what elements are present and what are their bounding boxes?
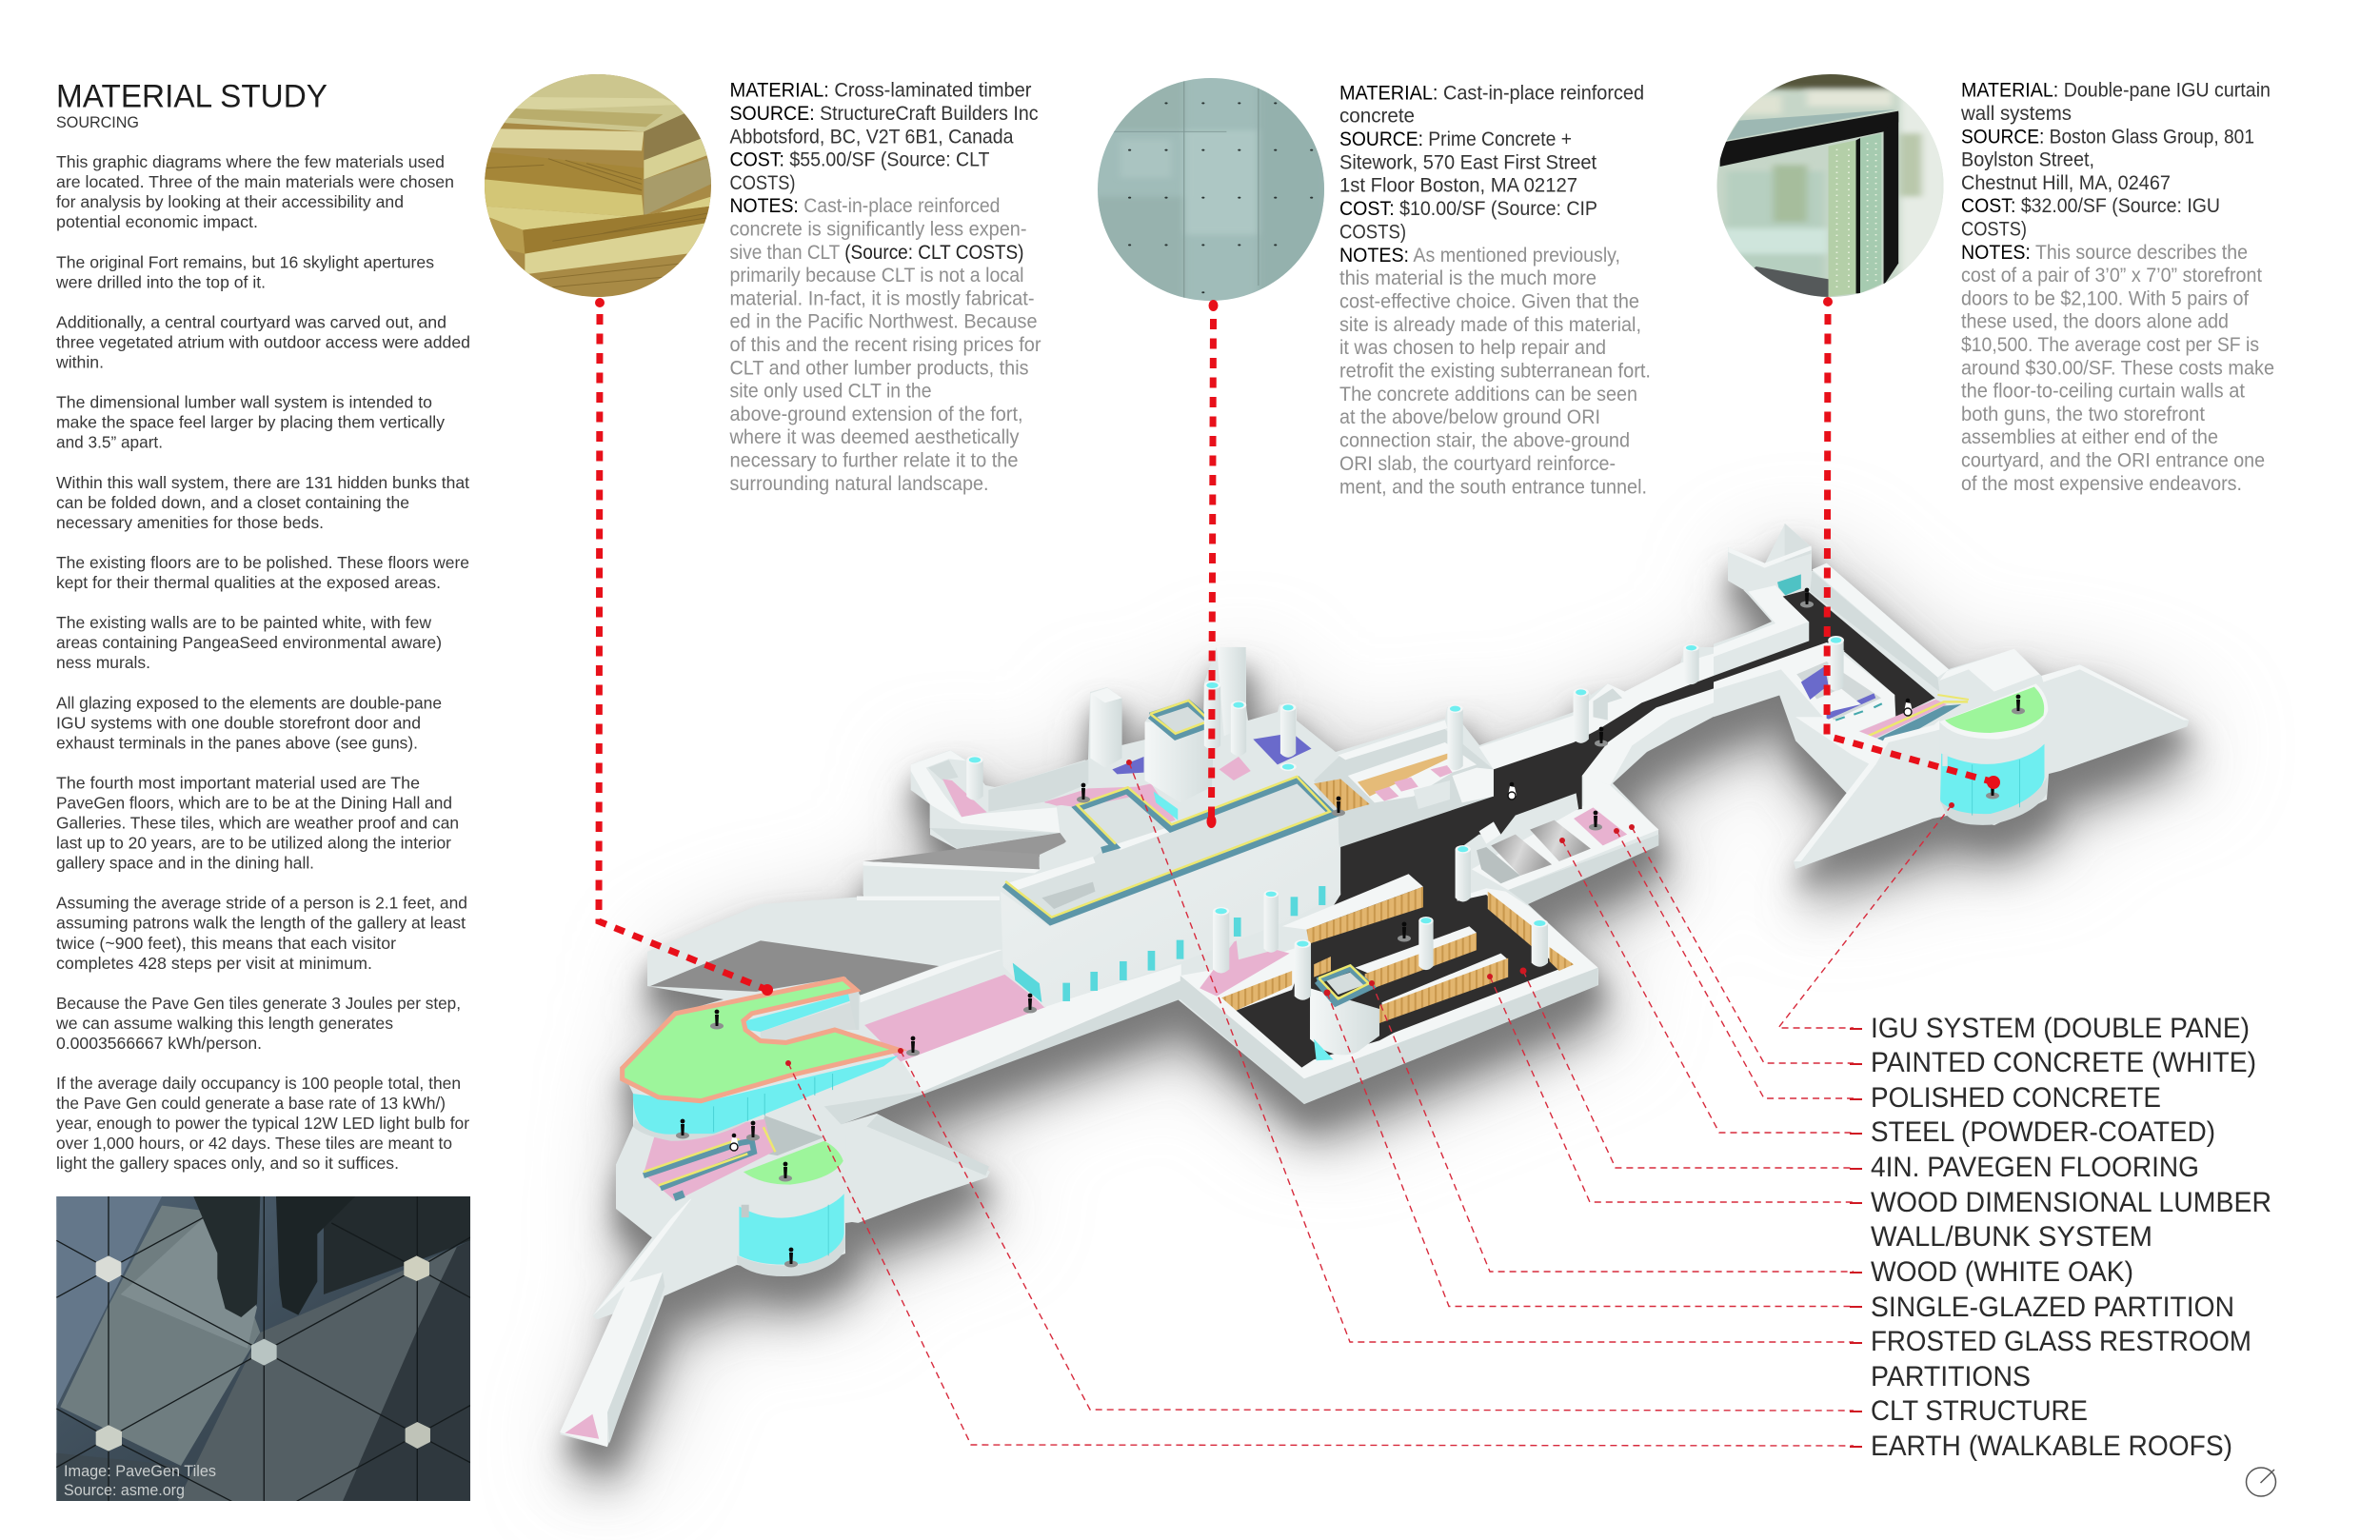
leader: steel	[1562, 840, 1854, 1133]
concrete source details: Sitework, 570 East First Street	[1339, 151, 1597, 173]
stairs room	[1477, 793, 1627, 883]
leader: earth roofs	[788, 1063, 1854, 1446]
text block: sourcing narrative: 0.0003566667 kWh/person.	[56, 1034, 262, 1053]
glass source details	[1960, 80, 2271, 240]
text block: IGU glass material	[1960, 80, 2274, 495]
text block: sourcing narrative: The fourth most important material used are The	[56, 774, 420, 793]
CLT notes: site only used CLT in the	[729, 381, 931, 403]
text block: sourcing narrative: Because the Pave Gen tiles generate 3 Joules per step,	[56, 994, 461, 1013]
text block: sourcing narrative: exhaust terminals in the panes above (see guns).	[56, 733, 418, 752]
text block: sourcing narrative: ness murals.	[56, 653, 150, 672]
text block: sourcing narrative: year, enough to power the typical 12W LED light bulb for	[56, 1114, 469, 1133]
leader: PaveGen flooring	[1523, 971, 1854, 1168]
material photo: double-pane IGU glass	[1714, 67, 1948, 302]
text block: sourcing narrative: Galleries. These tiles, which are weather proof and can	[56, 814, 459, 833]
east wedge	[2038, 664, 2189, 771]
leader dots	[785, 760, 1954, 1448]
legend of materials: WOOD (WHITE OAK)	[1871, 1256, 2133, 1288]
text block: sourcing narrative: Within this wall system, there are 131 hidden bunks that	[56, 473, 469, 492]
CLT notes: NOTES: Cast-in-place reinforced	[729, 195, 1000, 217]
text block: sourcing narrative	[55, 152, 470, 1173]
walkable roof	[623, 978, 899, 1101]
concrete notes: at the above/below ground ORI	[1339, 406, 1600, 428]
CLT notes: above-ground extension of the fort,	[729, 404, 1022, 425]
title: SOURCING	[56, 113, 139, 131]
enclosed ground void	[650, 940, 939, 996]
north walls	[1314, 654, 1714, 847]
text block: sourcing narrative: IGU systems with one double storefront door and	[56, 713, 421, 732]
concrete source details: 1st Floor Boston, MA 02127	[1339, 175, 1577, 197]
legend of materials: IGU SYSTEM (DOUBLE PANE)	[1871, 1013, 2250, 1044]
glass notes: courtyard, and the ORI entrance one	[1961, 449, 2265, 472]
glass notes: these used, the doors alone add	[1961, 311, 2229, 333]
concrete source details	[1339, 82, 1644, 243]
glass notes: cost of a pair of 3’0” x 7’0” storefront	[1961, 265, 2262, 286]
text block: sourcing narrative: twice (~900 feet), this means that each visitor	[56, 934, 396, 953]
title	[56, 78, 327, 131]
text block: sourcing narrative: necessary amenities for those beds.	[56, 513, 324, 532]
image caption	[64, 1462, 216, 1499]
concrete notes: ment, and the south entrance tunnel.	[1339, 476, 1647, 498]
legend of materials: 4IN. PAVEGEN FLOORING	[1871, 1152, 2199, 1183]
text block: sourcing narrative: Assuming the average stride of a person is 2.1 feet, and	[56, 894, 467, 913]
legend of materials: WOOD DIMENSIONAL LUMBER	[1871, 1187, 2271, 1218]
glass notes	[1961, 242, 2274, 495]
axonometric building diagram	[560, 523, 2203, 1487]
text block: sourcing narrative: The existing walls are to be painted white, with few	[56, 613, 431, 632]
glass notes: assemblies at either end of the	[1961, 426, 2218, 448]
thick callout: concrete	[1207, 300, 1219, 828]
leader: dimensional lumber	[1490, 977, 1854, 1202]
leader: IGU system	[1778, 805, 1952, 1028]
glass notes: doors to be $2,100. With 5 pairs of	[1961, 287, 2249, 309]
text block: sourcing narrative: If the average daily occupancy is 100 people total, then	[56, 1074, 461, 1093]
glass source details: Boylston Street,	[1961, 149, 2094, 171]
concrete notes: site is already made of this material,	[1339, 314, 1641, 336]
concrete notes	[1339, 245, 1651, 498]
legend of materials: WALL/BUNK SYSTEM	[1871, 1221, 2152, 1253]
glass source details: MATERIAL: Double-pane IGU curtain	[1961, 80, 2271, 102]
CLT notes: CLT and other lumber products, this	[729, 357, 1028, 379]
leader: painted concrete	[1632, 827, 1854, 1063]
ramp with rails	[644, 1116, 824, 1201]
text block: sourcing narrative: PaveGen floors, which are to be at the Dining Hall and	[56, 794, 452, 813]
material photo: cross-laminated timber	[485, 74, 711, 297]
dimensional lumber walls	[1221, 779, 1574, 1023]
north-east gun and entry	[1714, 523, 2189, 869]
legend of materials: FROSTED GLASS RESTROOM	[1871, 1326, 2251, 1357]
title: MATERIAL STUDY	[56, 78, 327, 114]
long north wall	[1810, 563, 2041, 701]
glazed main gun	[623, 978, 899, 1141]
CLT source details: Abbotsford, BC, V2T 6B1, Canada	[729, 126, 1014, 148]
central courtyard and CLT volume	[966, 644, 1714, 1104]
skylight columns	[966, 644, 1699, 1000]
concrete source details: MATERIAL: Cast-in-place reinforced	[1339, 82, 1644, 104]
icon: north arrow	[2247, 1468, 2275, 1496]
concrete mass base	[560, 523, 2189, 1447]
text block: sourcing narrative: are located. Three of the main materials were chosen	[56, 172, 454, 191]
CLT notes: necessary to further relate it to the	[729, 449, 1019, 472]
concrete source details: COSTS)	[1339, 221, 1406, 243]
legend of materials: CLT STRUCTURE	[1871, 1395, 2088, 1427]
towers behind	[1090, 647, 1312, 780]
CLT parapet frame	[1004, 777, 1334, 922]
CLT volume body	[1001, 816, 1340, 1007]
text block: concrete material	[1339, 82, 1651, 498]
legend of materials: STEEL (POWDER-COATED)	[1871, 1116, 2215, 1148]
concrete source details: SOURCE: Prime Concrete +	[1339, 128, 1572, 150]
CLT notes: material. In-fact, it is mostly fabricat-	[729, 287, 1034, 309]
photo: PaveGen tiles	[56, 1196, 470, 1501]
text block: sourcing narrative: can be folded down, and a closet containing the	[56, 493, 409, 512]
glass source details: Chestnut Hill, MA, 02467	[1961, 172, 2171, 194]
concrete source details: concrete	[1339, 106, 1415, 128]
glass notes: of the most expensive endeavors.	[1961, 473, 2242, 495]
CLT tower	[1145, 701, 1215, 820]
text block: sourcing narrative: the Pave Gen could generate a base rate of 13 kWh/)	[56, 1094, 446, 1113]
north-west wing	[857, 750, 1121, 964]
text block: sourcing narrative: we can assume walking this length generates	[55, 1014, 393, 1033]
text block: sourcing narrative: gallery space and in the dining hall.	[56, 854, 314, 873]
text block: sourcing narrative: The dimensional lumber wall system is intended to	[56, 393, 432, 412]
glass source details: SOURCE: Boston Glass Group, 801	[1961, 126, 2254, 148]
entry room walls	[1714, 523, 1812, 676]
text block: sourcing narrative: assuming patrons walk the length of the gallery at least	[56, 914, 466, 933]
CLT notes	[729, 195, 1041, 495]
south-west small gun wedges	[560, 1115, 989, 1447]
entry ramp	[1852, 695, 1969, 755]
concrete notes: The concrete additions can be seen	[1339, 384, 1637, 405]
leader: single-glazed partition	[1327, 993, 1854, 1306]
thick callout: IGU glass	[1823, 297, 2000, 789]
text block: sourcing narrative: for analysis by looking at their accessibility and	[56, 192, 404, 211]
legend of materials	[1871, 1013, 2271, 1462]
thin red leader lines	[788, 762, 1952, 1446]
image caption: Image: PaveGen Tiles	[64, 1462, 216, 1480]
glass source details: wall systems	[1960, 103, 2072, 125]
concrete notes: connection stair, the above-ground	[1339, 430, 1630, 452]
concrete notes: ORI slab, the courtyard reinforce-	[1339, 453, 1616, 475]
legend of materials: PAINTED CONCRETE (WHITE)	[1871, 1047, 2256, 1078]
glazed drum	[1939, 683, 2048, 825]
polished concrete floor	[1236, 676, 1714, 1068]
text block: sourcing narrative: over 1,000 hours, or 42 days. These tiles are meant to	[56, 1134, 452, 1153]
leader: CLT structure	[901, 1051, 1854, 1411]
CLT interior	[1008, 780, 1328, 917]
courtyard shaft	[1310, 965, 1379, 1060]
CLT notes: concrete is significantly less expen-	[729, 219, 1027, 240]
thick callout: CLT	[595, 298, 773, 996]
dining room	[1348, 742, 1494, 809]
glass source details: COST: $32.00/SF (Source: IGU	[1961, 195, 2220, 217]
text block: sourcing narrative: The original Fort remains, but 16 skylight apertures	[56, 252, 434, 271]
CLT notes: of this and the recent rising prices for	[729, 334, 1041, 356]
restroom room	[1714, 636, 1894, 733]
text block: sourcing narrative: areas containing PangeaSeed environmental aware)	[56, 633, 442, 652]
legend of materials: PARTITIONS	[1871, 1361, 2031, 1392]
concrete notes: cost-effective choice. Given that the	[1339, 291, 1639, 312]
glass notes: NOTES: This source describes the	[1961, 242, 2248, 264]
legend of materials: POLISHED CONCRETE	[1871, 1082, 2161, 1114]
CLT source details: MATERIAL: Cross-laminated timber	[729, 80, 1032, 102]
CLT notes: ed in the Pacific Northwest. Because	[729, 311, 1038, 333]
concrete notes: this material is the much more	[1339, 267, 1597, 289]
outer corner walls	[1779, 695, 1883, 793]
small gun drum	[737, 1137, 845, 1276]
CLT notes: sive than CLT (Source: CLT COSTS)	[729, 242, 1024, 264]
CLT notes: where it was deemed aesthetically	[729, 426, 1020, 448]
west gun and gallery	[560, 904, 1181, 1447]
glass notes: around $30.00/SF. These costs make	[1961, 357, 2274, 379]
concrete notes: NOTES: As mentioned previously,	[1339, 245, 1620, 267]
text block: sourcing narrative: This graphic diagrams where the few materials used	[56, 152, 445, 171]
CLT source details: SOURCE: StructureCraft Builders Inc	[729, 103, 1038, 125]
concrete notes: it was chosen to help repair and	[1339, 337, 1606, 359]
ground shadow	[564, 543, 2203, 1487]
text block: sourcing narrative: potential economic impact.	[56, 212, 258, 231]
tower pink corridor	[1044, 783, 1176, 823]
text block: sourcing narrative: were drilled into the top of it.	[55, 272, 266, 291]
gallery pink floor	[864, 975, 1046, 1061]
glass notes: $10,500. The average cost per SF is	[1961, 334, 2259, 356]
CLT notes: primarily because CLT is not a local	[729, 265, 1024, 286]
text block: sourcing narrative: three vegetated atrium with outdoor access were added	[56, 333, 470, 352]
west wedge	[1794, 721, 1939, 869]
text block: sourcing narrative: Additionally, a central courtyard was carved out, and	[56, 312, 446, 331]
text block: sourcing narrative: kept for their thermal qualities at the exposed areas.	[56, 573, 441, 592]
CLT notes: surrounding natural landscape.	[729, 473, 988, 495]
legend of materials: SINGLE-GLAZED PARTITION	[1871, 1292, 2234, 1323]
gallery pink room	[1200, 930, 1290, 997]
south gallery wall	[824, 950, 1181, 1125]
people figures	[676, 588, 2025, 1268]
text block: sourcing narrative: light the gallery spaces only, and so it suffices.	[56, 1154, 399, 1173]
text block: sourcing narrative: and 3.5” apart.	[56, 433, 163, 452]
concrete source details: COST: $10.00/SF (Source: CIP	[1339, 198, 1597, 220]
image caption: Source: asme.org	[64, 1481, 185, 1499]
CLT source details	[729, 80, 1038, 194]
material photo: cast-in-place concrete	[1095, 76, 1326, 305]
glass source details: COSTS)	[1961, 219, 2027, 240]
text block: sourcing narrative: completes 428 steps per visit at minimum.	[56, 954, 372, 973]
CLT source details: COST: $55.00/SF (Source: CLT	[729, 149, 990, 171]
CLT windows	[1013, 886, 1325, 1002]
legend of materials: EARTH (WALKABLE ROOFS)	[1871, 1431, 2232, 1462]
wedge retaining walls	[647, 904, 761, 986]
text block: CLT material	[729, 80, 1041, 495]
concrete notes: retrofit the existing subterranean fort.	[1339, 360, 1651, 383]
text block: sourcing narrative: The existing floors are to be polished. These floors were	[56, 553, 469, 572]
text block: sourcing narrative: make the space feel larger by placing them vertically	[56, 413, 445, 432]
road floor	[1714, 590, 1935, 717]
perimeter wall tops	[1180, 688, 1714, 1104]
leader: frosted glass partitions	[1129, 762, 1854, 1342]
glass notes: the floor-to-ceiling curtain walls at	[1961, 381, 2245, 403]
leader: white oak	[1372, 983, 1854, 1272]
text block: sourcing narrative: within.	[55, 352, 104, 371]
text block: sourcing narrative: last up to 20 years, are to be utilized along the interior	[56, 834, 451, 853]
leader: polished concrete	[1616, 831, 1854, 1098]
text block: sourcing narrative: All glazing exposed to the elements are double-pane	[56, 693, 442, 712]
CLT source details: COSTS)	[729, 172, 796, 194]
glass notes: both guns, the two storefront	[1961, 404, 2205, 425]
